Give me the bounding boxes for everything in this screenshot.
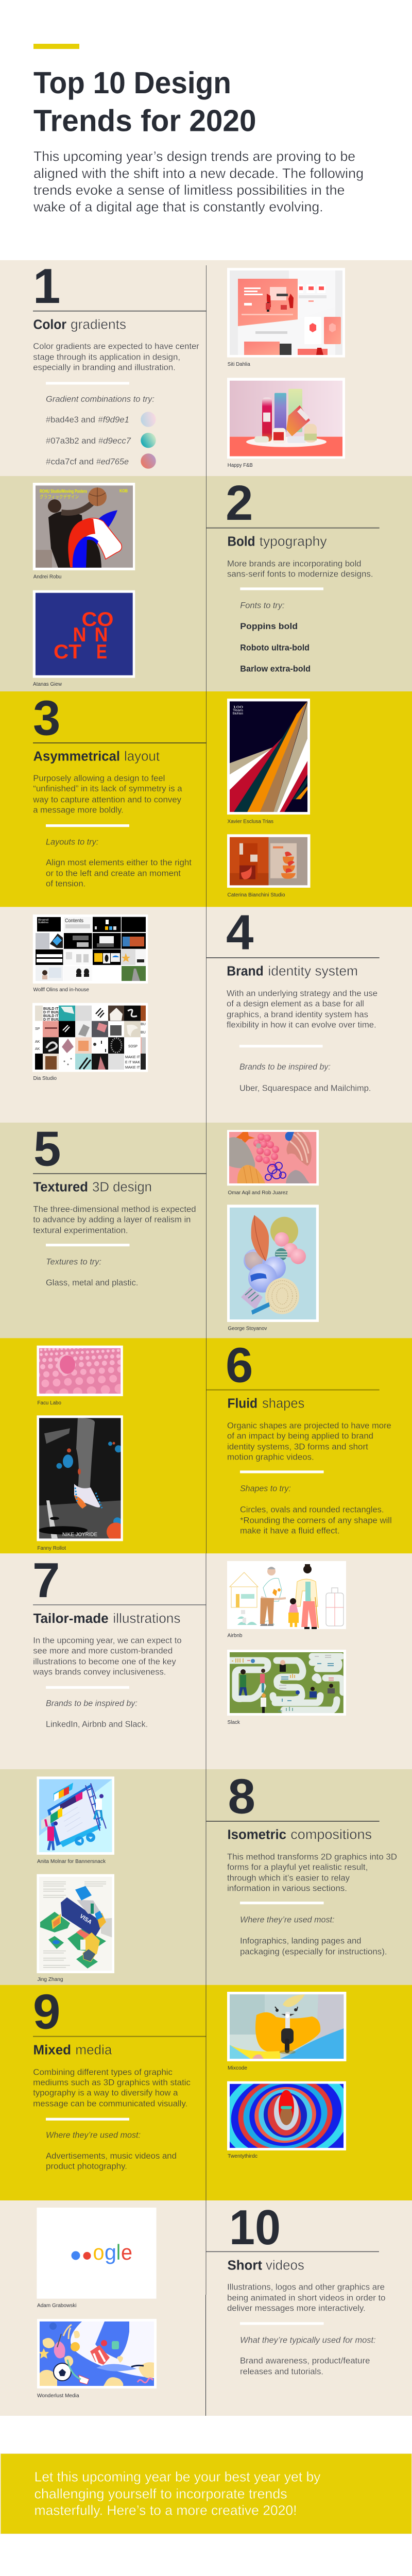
heading — [33, 317, 126, 332]
body text: ways brands convey inclusiveness. — [32, 1667, 166, 1676]
body text: message can be communicated visually. — [33, 2098, 187, 2108]
image: Dia Studio grid: SP — [35, 1027, 40, 1031]
layouts list: Align most elements either to the right — [46, 857, 192, 867]
heading: shapes — [262, 1396, 304, 1411]
usage list: Brand awareness, product/feature — [240, 2355, 370, 2365]
image: Atanas Giew poster: CO — [81, 608, 113, 631]
image: Jing Zhang isometric infographic — [37, 1874, 114, 1973]
heading — [228, 1396, 304, 1411]
number 10: 10 — [229, 2200, 281, 2255]
body text: of an impact by being applied to brand — [227, 1431, 373, 1440]
intro text: trends evoke a sense of limitless possibilities in the — [33, 182, 345, 198]
image: Andrei Robu poster: ROHU Studio/Moving Posters — [40, 488, 87, 494]
font list: Barlow extra-bold — [240, 664, 311, 673]
image: Dia Studio grid: SOSP — [128, 1045, 138, 1048]
intro text: This upcoming year’s design trends are proving to be — [33, 149, 355, 164]
panel: trend 6 fluid shapes — [0, 1338, 412, 1553]
number 4: 4 — [226, 905, 253, 960]
heading — [33, 2043, 112, 2057]
image: Dia Studio grid: MAKE IT — [125, 1066, 141, 1070]
image: Xavier Esclusa Trias poster: Bauhaus — [233, 712, 243, 715]
heading — [33, 1180, 152, 1195]
layouts list — [46, 837, 192, 888]
usage list — [46, 2130, 177, 2171]
body text: information in various sections. — [227, 1883, 347, 1893]
body text: being animated in short videos in order to — [227, 2293, 385, 2303]
body text — [33, 341, 199, 372]
heading: 3D design — [92, 1180, 152, 1195]
usage list — [240, 1914, 387, 1956]
usage list: Infographics, landing pages and — [240, 1936, 362, 1945]
font list: Poppins bold — [240, 621, 298, 631]
image: Xavier Esclusa Trias poster: 100 — [233, 706, 244, 709]
heading: media — [75, 2043, 112, 2057]
intro text: wake of a digital age that is constantly evolving. — [33, 199, 323, 215]
heading — [228, 1827, 372, 1842]
heading: Short — [228, 2259, 263, 2273]
intro text — [33, 149, 364, 215]
body text: a message more boldly. — [33, 805, 124, 815]
panel: trend 5 textured 3D design — [0, 1121, 412, 1338]
body text — [33, 2067, 191, 2108]
heading: videos — [266, 2259, 304, 2273]
gradient list: #ed765e — [96, 457, 129, 467]
font list: Fonts to try: — [240, 600, 285, 610]
body text — [32, 773, 182, 815]
usage list: Where they’re used most: — [240, 1914, 335, 1924]
image: Adam Grabowski animated logo: o — [93, 2240, 104, 2264]
body text — [227, 558, 373, 579]
image: Xavier Esclusa Trias poster: Years — [233, 709, 243, 712]
inspiration list — [46, 1698, 148, 1729]
caption: Xavier Esclusa Trias — [228, 819, 273, 824]
number 1: 1 — [33, 259, 60, 314]
image: Dia Studio grid: BU — [141, 1023, 146, 1026]
caption: Adam Grabowski — [37, 2303, 76, 2309]
panel: trend 3 asymmetrical layout — [0, 691, 412, 907]
body text: motion graphic videos. — [227, 1452, 314, 1462]
panel: trend 7 tailor-made illustrations — [0, 1553, 412, 1769]
panel: trend 8 isometric compositions — [0, 1769, 412, 1985]
usage list: packaging (especially for instructions). — [240, 1946, 387, 1956]
heading: layout — [124, 750, 160, 764]
image: Mixcode scooter — [227, 1992, 346, 2061]
number 5: 5 — [33, 1121, 61, 1176]
body text — [32, 1635, 182, 1676]
center divider — [206, 265, 207, 2416]
body text — [227, 2282, 385, 2313]
inspiration list: Uber, Squarespace and Mailchimp. — [239, 1083, 371, 1093]
number 3: 3 — [33, 691, 60, 746]
intro text: aligned with the shift into a new decade. The following — [33, 165, 364, 181]
body text: flexibility in how it can evolve over time. — [227, 1020, 376, 1030]
image: Atanas Giew poster: N — [73, 624, 87, 646]
image: Twentythirdc swirl — [215, 2057, 358, 2173]
body text — [227, 1852, 397, 1893]
heading — [227, 964, 358, 978]
body text: This method transforms 2D graphics into 3D — [227, 1852, 397, 1861]
image: Fanny Rollot Nike poster: NIKE JOYRIDE — [62, 1532, 97, 1537]
image: Wolff Olins brand guidelines grid: Guidelines — [38, 921, 48, 924]
shapes list: Circles, ovals and rounded rectangles. — [240, 1504, 384, 1514]
body text: stage through its application in design, — [33, 352, 180, 362]
body text: identity systems, 3D forms and short — [227, 1442, 368, 1451]
number 6: 6 — [226, 1338, 253, 1393]
number 7: 7 — [32, 1553, 60, 1608]
caption: Siti Dahlia — [228, 362, 250, 367]
caption: Andrei Robu — [33, 574, 61, 580]
caption: Happy F&B — [228, 463, 253, 468]
image: Caterina Bianchini Studio posters — [227, 834, 310, 888]
image: Jing Zhang isometric infographic: VISA — [78, 1913, 93, 1926]
body text: With an underlying strategy and the use — [227, 988, 377, 998]
textures list: Glass, metal and plastic. — [46, 1278, 138, 1287]
caption: Wonderlust Media — [37, 2393, 79, 2399]
usage list: releases and tutorials. — [240, 2366, 323, 2376]
body text: Combining different types of graphic — [33, 2067, 173, 2077]
body text: “unfinished” in its lack of symmetry is a — [33, 784, 182, 793]
heading — [228, 2259, 304, 2273]
closing callout: Let this upcoming year be your best year yet by — [34, 2469, 321, 2485]
panel: trend 1 color gradients — [0, 259, 412, 476]
caption: Slack — [228, 1720, 241, 1725]
image: Adam Grabowski animated logo: e — [121, 2240, 132, 2264]
image: Dia Studio grid: E IT MAK — [125, 1061, 140, 1064]
caption: Fanny Rollot — [37, 1546, 66, 1551]
closing callout: challenging yourself to incorporate trends — [34, 2486, 287, 2501]
heading: Brand — [227, 964, 264, 978]
caption: Airbnb — [228, 1633, 243, 1639]
image: Atanas Giew poster: N — [95, 624, 108, 646]
shapes list: Shapes to try: — [240, 1483, 291, 1493]
image: Facu Labo pink domes — [34, 1345, 124, 1396]
body text: The three-dimensional method is expected — [33, 1204, 196, 1214]
gradient list — [46, 394, 156, 469]
usage list: What they’re typically used for most: — [240, 2335, 376, 2345]
image: Wolff Olins brand guidelines grid — [33, 914, 148, 984]
body text — [227, 1420, 391, 1462]
gradient list: #d9ecc7 — [98, 436, 131, 446]
image: Andrei Robu poster: KOB — [119, 488, 128, 493]
caption: Dia Studio — [33, 1076, 57, 1081]
title — [33, 65, 256, 138]
image: Dia Studio grid: MAKE IT — [125, 1056, 141, 1059]
image: Fanny Rollot Nike poster — [37, 1415, 125, 1541]
textures list — [46, 1257, 138, 1287]
caption: Caterina Bianchini Studio — [228, 892, 285, 898]
body text: sans-serif fonts to modernize designs. — [227, 569, 373, 579]
body text: deliver messages more interactively. — [227, 2303, 366, 2313]
body text: Color gradients are expected to have center — [33, 341, 199, 351]
heading: Fluid — [228, 1396, 258, 1411]
layouts list: Layouts to try: — [46, 837, 99, 846]
caption: Facu Labo — [37, 1400, 61, 1406]
heading: Tailor-made — [33, 1612, 109, 1626]
heading: Color — [33, 317, 66, 332]
image: Slack illustration — [227, 1650, 346, 1716]
closing callout — [1, 2453, 412, 2534]
usage list: Where they’re used most: — [46, 2130, 141, 2140]
gradient list: #cda7cf and — [46, 457, 94, 467]
image: Adam Grabowski animated logo — [37, 2208, 157, 2299]
image: Andrei Robu poster — [33, 483, 135, 570]
image: Happy F&B packaging — [227, 378, 345, 459]
body text: see more and more custom-branded — [33, 1646, 173, 1655]
panel: trend 4 brand identity system — [0, 905, 412, 1123]
image: Anita Molnar isometric screen — [37, 1776, 114, 1855]
image: Wolff Olins brand guidelines grid: Contents — [65, 918, 83, 924]
heading: typography — [260, 534, 327, 549]
heading: identity system — [268, 964, 358, 978]
heading: gradients — [71, 317, 126, 332]
usage list: product photography. — [46, 2161, 127, 2171]
body text: More brands are incorporating bold — [227, 558, 362, 568]
caption: Wolff Olins and in-house — [33, 987, 89, 993]
caption: Anita Molnar for Bannersnack — [37, 1859, 106, 1865]
body text — [33, 1204, 196, 1235]
panel: trend 10 short videos — [0, 2200, 412, 2416]
image: Xavier Esclusa Trias poster — [227, 699, 310, 815]
heading: Mixed — [33, 2043, 71, 2057]
textures list: Textures to try: — [46, 1257, 101, 1266]
body text: textural experimentation. — [33, 1225, 128, 1235]
image: Dia Studio grid: D IT BUIL — [43, 1011, 60, 1014]
image: Atanas Giew poster — [33, 590, 135, 678]
layouts list: of tension. — [46, 878, 85, 888]
image: Airbnb illustration — [227, 1561, 346, 1629]
usage list — [240, 2335, 376, 2376]
image: Siti Dahlia web layout — [227, 268, 345, 358]
heading: Isometric — [228, 1827, 286, 1842]
caption: George Stoyanov — [228, 1326, 267, 1332]
gradient list: #bad4e3 and — [46, 415, 95, 425]
body text: typography is a way to diversify how a — [33, 2088, 178, 2097]
caption: Mixcode — [228, 2065, 247, 2071]
caption: Atanas Giew — [33, 682, 62, 687]
image: Atanas Giew poster: E — [96, 641, 107, 663]
image: Adam Grabowski animated logo: l — [116, 2240, 121, 2264]
image: Adam Grabowski animated logo: g — [105, 2240, 116, 2264]
body text: In the upcoming year, we can expect to — [33, 1635, 182, 1645]
heading: illustrations — [113, 1612, 180, 1626]
caption: Twentythirdc — [228, 2154, 258, 2159]
panel: trend 9 mixed media — [0, 1985, 412, 2200]
title: Top 10 Design — [33, 65, 231, 100]
image: Dia Studio grid: BUILD IT — [43, 1014, 59, 1018]
title: Trends for 2020 — [33, 103, 256, 138]
image: Dia Studio grid: BUILD IT — [43, 1007, 59, 1011]
gradient list: #07a3b2 and — [46, 436, 96, 446]
caption: Omar Aqil and Rob Juarez — [228, 1190, 288, 1196]
body text: especially in branding and illustration. — [33, 362, 176, 372]
heading — [228, 534, 327, 549]
body text: Illustrations, logos and other graphics are — [227, 2282, 385, 2292]
inspiration list: Brands to be inspired by: — [239, 1062, 331, 1072]
image: Omar Aqil 3D collage — [227, 1130, 319, 1185]
usage list: Advertisements, music videos and — [46, 2151, 177, 2161]
image: Andrei Robu poster: グラフィックデザイン — [40, 494, 79, 499]
body text: forms for a playful yet realistic result, — [227, 1862, 368, 1872]
heading — [33, 1612, 180, 1626]
heading: compositions — [290, 1827, 372, 1842]
image: Atanas Giew poster: CT — [54, 641, 81, 663]
panel: trend 2 bold typography — [0, 476, 412, 691]
body text: of a design element as a base for all — [227, 998, 364, 1008]
heading: Asymmetrical — [33, 750, 120, 764]
body text: illustrations to become one of the key — [33, 1656, 176, 1666]
image: Wonderlust Media illustration — [37, 2319, 157, 2388]
heading: Textured — [33, 1180, 88, 1195]
body text: way to capture attention and to convey — [32, 794, 181, 804]
body text: Organic shapes are projected to have more — [227, 1420, 391, 1430]
heading — [33, 750, 160, 764]
inspiration list: LinkedIn, Airbnb and Slack. — [46, 1719, 148, 1729]
body text — [227, 988, 377, 1030]
heading: Bold — [228, 534, 255, 549]
shapes list — [240, 1483, 392, 1535]
accent bar — [33, 44, 79, 49]
image: Dia Studio grid: D IT BUIL — [43, 1018, 60, 1022]
gradient list: #f9d9e1 — [98, 415, 129, 425]
image: Dia Studio grid: AK — [35, 1047, 40, 1051]
image: Dia Studio grid: AK — [35, 1040, 40, 1044]
caption: Jing Zhang — [37, 1977, 63, 1982]
number 8: 8 — [228, 1769, 255, 1824]
closing callout: masterfully. Here’s to a more creative 2020! — [34, 2503, 297, 2518]
body text: through which it’s easier to relay — [227, 1873, 350, 1883]
body text: Purposely allowing a design to feel — [33, 773, 165, 783]
gradient list: Gradient combinations to try: — [46, 394, 154, 404]
inspiration list — [239, 1062, 371, 1093]
body text: to advance by adding a layer of realism in — [33, 1214, 191, 1224]
inspiration list: Brands to be inspired by: — [46, 1698, 138, 1708]
number 2: 2 — [226, 476, 253, 531]
shapes list: *Rounding the corners of any shape will — [240, 1515, 392, 1525]
font list: Roboto ultra-bold — [240, 642, 310, 652]
font list — [240, 600, 311, 673]
image: Wolff Olins brand guidelines grid: Brand — [38, 919, 48, 922]
image: Dia Studio grid: BU — [141, 1031, 146, 1035]
shapes list: make it have a fluid effect. — [240, 1526, 340, 1535]
body text: mediums such as 3D graphics with static — [33, 2077, 191, 2087]
body text: graphics, a brand identity system has — [227, 1009, 368, 1019]
image: George Stoyanov 3D composition — [227, 1205, 319, 1322]
layouts list: or to the left and create an moment — [46, 868, 181, 878]
number 9: 9 — [33, 1985, 60, 2040]
image: Dia Studio grid — [32, 1003, 148, 1072]
